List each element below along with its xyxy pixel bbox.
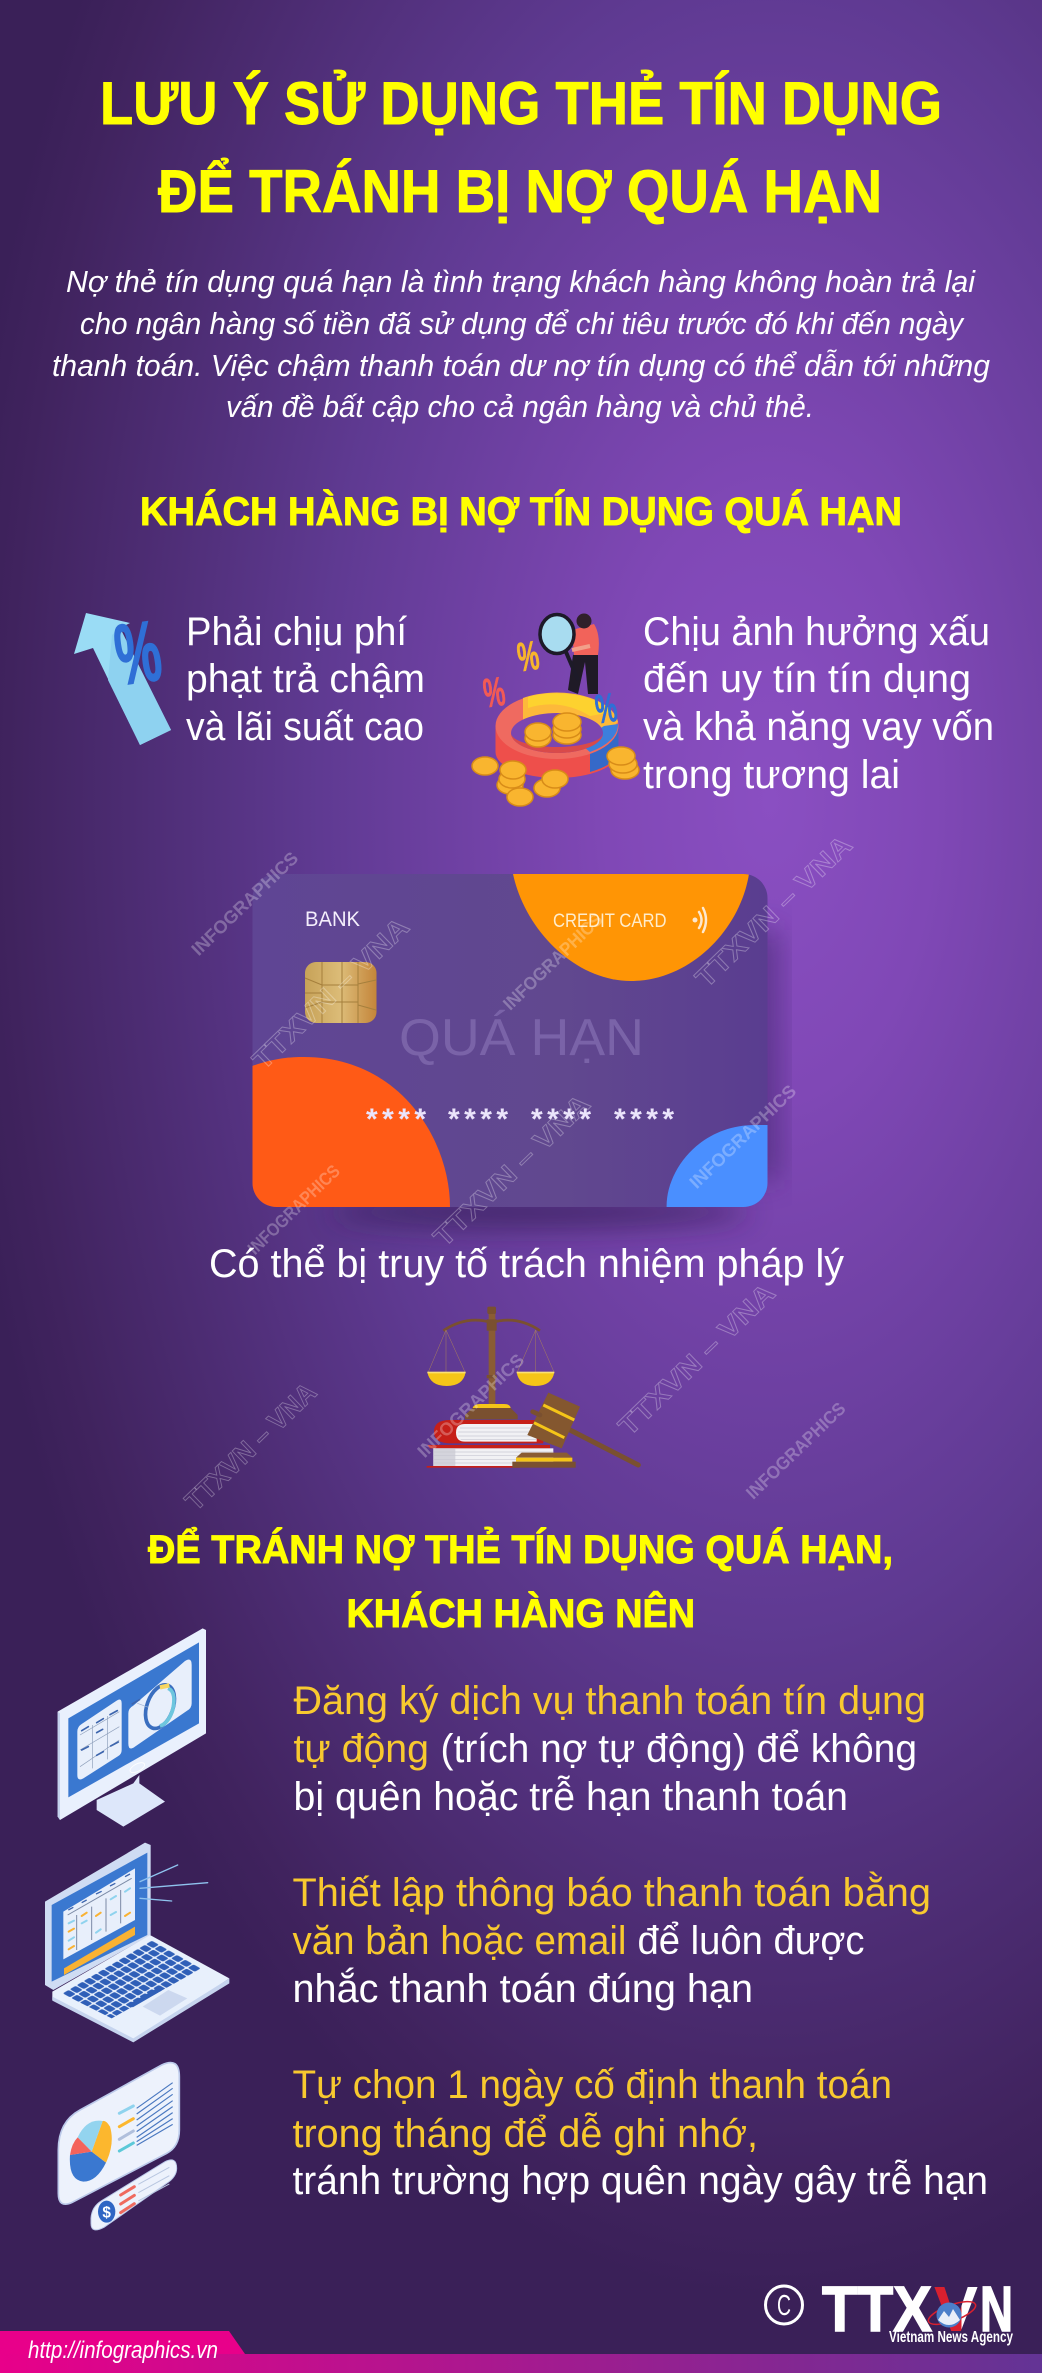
bank label: BANK xyxy=(305,908,360,931)
copyright symbol: C xyxy=(777,2290,791,2322)
title: LƯU Ý SỬ DỤNG THẺ TÍN DỤNG xyxy=(100,70,942,137)
card number xyxy=(366,1103,674,1136)
card number: **** xyxy=(448,1103,508,1136)
card orange shape xyxy=(513,874,749,981)
intro paragraph: vấn đề bất cập cho cả ngân hàng và chủ thẻ. xyxy=(226,389,814,424)
tip 3 text: Tự chọn 1 ngày cố định thanh toán xyxy=(292,2063,892,2107)
watermarks: TTXVN – VNA xyxy=(428,1089,596,1253)
tip 1 text xyxy=(294,1679,926,1819)
watermarks: INFOGRAPHICS xyxy=(414,1350,528,1462)
card number: **** xyxy=(531,1103,591,1136)
credit card label: CREDIT CARD xyxy=(553,911,666,932)
main card xyxy=(58,2063,179,2204)
watermarks xyxy=(179,830,858,1516)
copyright symbol xyxy=(766,2286,802,2324)
logo: TTXVN: V xyxy=(934,2273,978,2345)
text: credit reputation: đến uy tín tín dụng xyxy=(643,657,971,701)
coins xyxy=(472,713,639,806)
watermarks: INFOGRAPHICS xyxy=(499,909,607,1014)
gavel xyxy=(512,1393,638,1468)
icon: desktop monitor xyxy=(58,1628,206,1827)
logo: TTXVN: TTX xyxy=(822,2273,932,2345)
laptop screen table xyxy=(63,1868,135,1959)
icon: up arrow with percent xyxy=(74,602,171,745)
url: http://infographics.vn xyxy=(28,2337,218,2364)
pie chart xyxy=(70,2121,112,2182)
watermarks: INFOGRAPHICS xyxy=(686,1081,800,1193)
text: credit reputation xyxy=(643,610,994,797)
icon: laptop xyxy=(45,1843,229,2042)
tip 3 text: tránh trường hợp quên ngày gây trễ hạn xyxy=(292,2158,988,2203)
intro paragraph: Nợ thẻ tín dụng quá hạn là tình trạng khách hàng không hoàn trả lại xyxy=(66,264,976,299)
tip 2 text: để luôn được xyxy=(638,1919,864,1963)
table panel xyxy=(77,1699,122,1779)
heading: how to avoid overdue debt xyxy=(148,1525,893,1636)
logo: TTXVN xyxy=(822,2273,1013,2346)
chart panel xyxy=(128,1660,192,1749)
ring chart xyxy=(496,693,618,778)
contactless icon xyxy=(692,908,706,932)
watermarks: TTXVN – VNA xyxy=(690,830,858,994)
text: late fees: phạt trả chậm xyxy=(186,657,425,701)
watermarks: TTXVN – VNA xyxy=(179,1377,322,1516)
lower card xyxy=(91,2160,177,2230)
card blue shape xyxy=(667,1125,768,1207)
icon: payment dashboard cards xyxy=(58,2063,179,2230)
title xyxy=(100,70,942,225)
tip 1 text: (trích nợ tự động) để không xyxy=(440,1727,917,1771)
icon: scales, books and gavel xyxy=(427,1307,638,1468)
heading: how to avoid overdue debt: KHÁCH HÀNG NÊN xyxy=(346,1590,695,1636)
watermarks: INFOGRAPHICS xyxy=(742,1398,850,1503)
card number: **** xyxy=(366,1103,426,1136)
card number: **** xyxy=(614,1103,674,1136)
chip xyxy=(305,962,376,1023)
text: late fees: và lãi suất cao xyxy=(186,705,424,749)
tip 3 text: trong tháng để dễ ghi nhớ, xyxy=(292,2111,758,2156)
tip 2 text: văn bản hoặc email xyxy=(292,1919,626,1963)
credit card xyxy=(252,874,780,1228)
tip 3 text xyxy=(292,2063,988,2203)
title: ĐỂ TRÁNH BỊ NỢ QUÁ HẠN xyxy=(158,158,882,225)
lower card: $ xyxy=(102,2204,111,2221)
card red shape xyxy=(252,1057,450,1207)
watermarks: INFOGRAPHICS xyxy=(188,848,302,960)
intro paragraph: thanh toán. Việc chậm thanh toán dư nợ tín dụng có thể dẫn tới những xyxy=(52,348,990,383)
text: late fees xyxy=(186,610,425,749)
overdue label on card: QUÁ HẠN xyxy=(399,1009,644,1067)
watermarks: TTXVN – VNA xyxy=(613,1278,781,1442)
text: late fees: Phải chịu phí xyxy=(186,610,407,654)
card body xyxy=(252,874,768,1207)
logo: TTXVN: N xyxy=(980,2273,1013,2345)
text: credit reputation: trong tương lai xyxy=(643,753,900,797)
icon: person with magnifier, ring chart and coins: % xyxy=(593,686,620,733)
monitor stand xyxy=(97,1775,165,1827)
heading: customers in overdue debt: KHÁCH HÀNG BỊ NỢ TÍN DỤNG QUÁ HẠN xyxy=(140,489,902,534)
books xyxy=(427,1420,553,1468)
tip 2 text: nhắc thanh toán đúng hạn xyxy=(292,1966,753,2011)
tip 2 text: Thiết lập thông báo thanh toán bằng xyxy=(292,1870,931,1915)
text: legal liability: Có thể bị truy tố trách nhiệm pháp lý xyxy=(209,1242,844,1286)
laptop rays xyxy=(140,1865,208,1901)
footer band xyxy=(0,2331,1042,2373)
watermarks: TTXVN – VNA xyxy=(247,912,415,1076)
laptop base xyxy=(52,1935,229,2042)
card shadow xyxy=(330,1196,750,1228)
intro paragraph xyxy=(52,264,990,424)
icon: person with magnifier, ring chart and coins: % xyxy=(481,670,508,717)
tip 1 text: tự động xyxy=(294,1727,429,1771)
person xyxy=(540,614,599,694)
heading: how to avoid overdue debt: ĐỂ TRÁNH NỢ THẺ TÍN DỤNG QUÁ HẠN, xyxy=(148,1525,893,1572)
icon: up arrow with percent: % xyxy=(109,602,167,703)
text: credit reputation: Chịu ảnh hưởng xấu xyxy=(643,610,990,654)
percent glyphs: % xyxy=(515,634,542,681)
tip 1 text: Đăng ký dịch vụ thanh toán tín dụng xyxy=(294,1679,926,1723)
intro paragraph: cho ngân hàng số tiền đã sử dụng để chi tiêu trước đó khi đến ngày xyxy=(80,306,965,341)
tip 2 text xyxy=(292,1870,931,2011)
tip 1 text: bị quên hoặc trễ hạn thanh toán xyxy=(294,1774,848,1819)
watermarks: INFOGRAPHICS xyxy=(244,1161,344,1259)
icon: person with magnifier, ring chart and coins xyxy=(472,614,639,806)
text: credit reputation: và khả năng vay vốn xyxy=(643,705,994,749)
scales xyxy=(427,1307,554,1419)
